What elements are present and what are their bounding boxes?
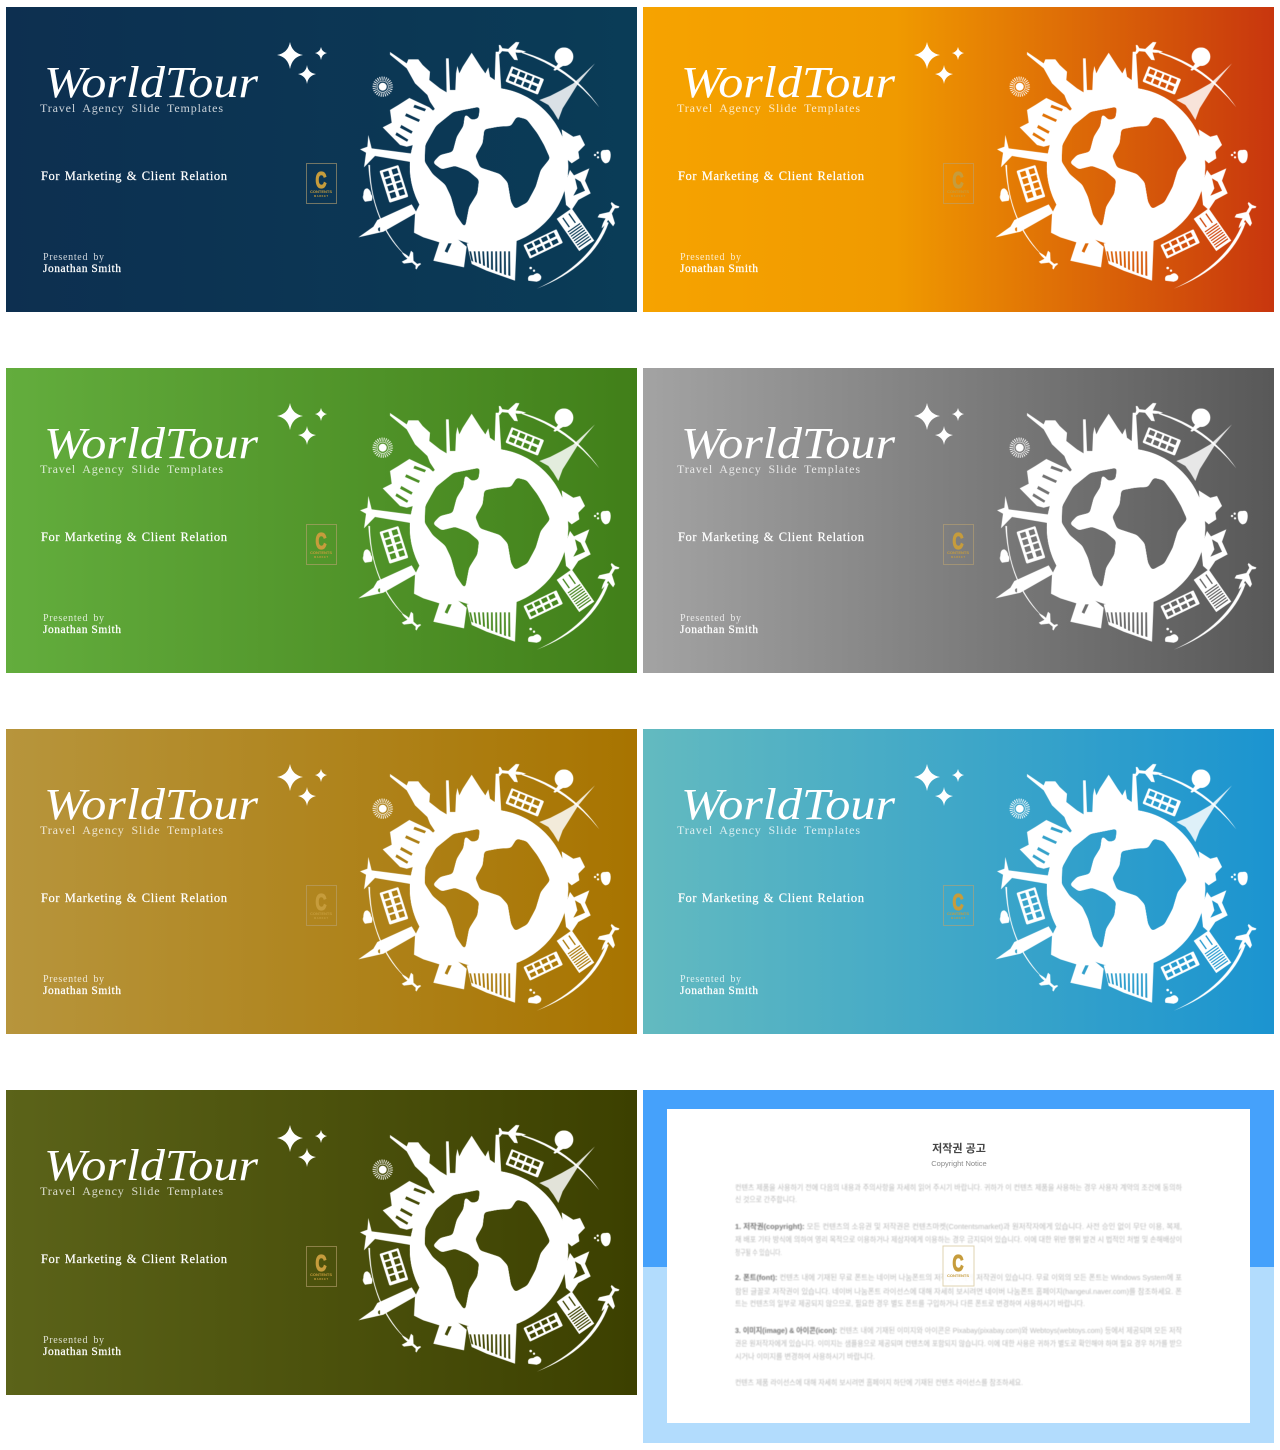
logo: CONTENTS bbox=[310, 911, 332, 916]
logo: MARKET bbox=[951, 556, 965, 559]
copyright body text: 트는 컨텐츠의 일부로 제공되지 않으므로, 필요한 경우 별도 폰트를 구입하거나 다른 폰트로 변경하여 사용하시기 바랍니다. bbox=[735, 1298, 1085, 1308]
subtitle: Travel Agency Slide Templates bbox=[677, 462, 860, 476]
logo: MARKET bbox=[314, 1278, 328, 1281]
logo bbox=[306, 524, 336, 564]
copyright body text: 신 것으로 간주합니다. bbox=[735, 1194, 797, 1204]
presenter name: Jonathan Smith bbox=[43, 985, 121, 997]
illustration: globe with landmarks bbox=[358, 1123, 623, 1372]
logo: CONTENTS bbox=[947, 1273, 969, 1278]
title: WorldTour bbox=[681, 780, 896, 829]
icon: stars bbox=[914, 42, 964, 84]
tagline: For Marketing & Client Relation bbox=[41, 530, 228, 544]
presenter name: Jonathan Smith bbox=[43, 263, 121, 275]
tagline: For Marketing & Client Relation bbox=[41, 1252, 228, 1266]
icon: stars bbox=[277, 403, 327, 445]
icon: stars bbox=[277, 764, 327, 806]
logo: C bbox=[316, 528, 326, 554]
logo: CONTENTS bbox=[310, 189, 332, 194]
logo bbox=[944, 164, 974, 204]
title: WorldTour bbox=[681, 58, 896, 107]
logo bbox=[944, 524, 974, 564]
illustration: globe with landmarks bbox=[358, 762, 623, 1011]
icon: stars bbox=[914, 403, 964, 445]
logo: CONTENTS bbox=[310, 550, 332, 555]
tagline: For Marketing & Client Relation bbox=[41, 169, 228, 183]
logo: MARKET bbox=[951, 195, 965, 198]
icon: stars bbox=[914, 764, 964, 806]
panel: copyright notice bbox=[643, 1090, 1274, 1443]
panel: gray slide bbox=[643, 368, 1274, 673]
tagline: For Marketing & Client Relation bbox=[678, 169, 865, 183]
illustration: globe with landmarks bbox=[995, 40, 1260, 289]
logo bbox=[944, 886, 974, 926]
copyright body text: 권은 원저작자에게 있습니다. 이미지는 샘플용으로 제공되며 컨텐츠에 포함되지 않습니다. 이에 대한 사용은 귀하가 별도로 확인해야 하며 필요 경우 허가를 받으 bbox=[735, 1338, 1182, 1348]
tagline: For Marketing & Client Relation bbox=[41, 891, 228, 905]
panel: teal-blue slide bbox=[643, 729, 1274, 1034]
logo: C bbox=[316, 1250, 326, 1276]
presenter name: Jonathan Smith bbox=[680, 624, 758, 636]
title: WorldTour bbox=[44, 419, 259, 468]
copyright body text: 3. 이미지(image) & 아이콘(icon): 컨텐츠 내에 기재된 이미지와 아이콘은 Pixabay(pixabay.com)와 Webtoys(webtoys.com) 등에서 제공되며 모든 저작 bbox=[735, 1325, 1182, 1335]
copyright body text: 시거나 이미지를 변경하여 사용하시기 바랍니다. bbox=[735, 1351, 875, 1361]
illustration: globe with landmarks bbox=[358, 401, 623, 650]
logo bbox=[306, 1246, 336, 1286]
presenter name: Jonathan Smith bbox=[43, 624, 121, 636]
copyright body text: 1. 저작권(copyright): 모든 컨텐츠의 소유권 및 저작권은 컨텐츠마켓(Contentsmarket)과 원저작자에게 있습니다. 사전 승인 없이 무단 이용, 복제, bbox=[735, 1221, 1182, 1231]
title: WorldTour bbox=[44, 780, 259, 829]
subtitle: Travel Agency Slide Templates bbox=[40, 101, 223, 115]
copyright body text: 2. 폰트(font): 컨텐츠 내에 기재된 무료 폰트는 네이버 나눔폰트의 저작권자에게 저작권이 있습니다. 무료 이외의 모든 폰트는 Windows System에 포 bbox=[735, 1272, 1182, 1282]
logo: C bbox=[952, 889, 964, 915]
logo: CONTENTS bbox=[947, 189, 969, 194]
panel: green slide bbox=[6, 368, 637, 673]
copyright body text bbox=[735, 1182, 1182, 1387]
presenter name: Jonathan Smith bbox=[680, 263, 758, 275]
copyright body text: 컨텐츠 제품을 사용하기 전에 다음의 내용과 주의사항을 자세히 읽어 주시기 바랍니다. 귀하가 이 컨텐츠 제품을 사용하는 경우 사용자 계약의 조건에 동의하 bbox=[735, 1182, 1182, 1192]
copyright body text: 컨텐츠 제품 라이선스에 대해 자세히 보시려면 홈페이지 하단에 기재된 컨텐츠 라이선스를 참조하세요. bbox=[735, 1377, 1023, 1387]
presenter name: Jonathan Smith bbox=[43, 1346, 121, 1358]
logo: MARKET bbox=[314, 917, 328, 920]
logo bbox=[306, 886, 336, 926]
logo bbox=[943, 1246, 974, 1286]
subtitle: Travel Agency Slide Templates bbox=[40, 823, 223, 837]
logo: CONTENTS bbox=[947, 550, 969, 555]
presenter name: Jonathan Smith bbox=[680, 985, 758, 997]
logo: C bbox=[952, 1250, 964, 1276]
subtitle: Travel Agency Slide Templates bbox=[40, 462, 223, 476]
logo: C bbox=[952, 167, 964, 193]
subtitle: Travel Agency Slide Templates bbox=[40, 1184, 223, 1198]
subtitle: Travel Agency Slide Templates bbox=[677, 823, 860, 837]
subtitle: Travel Agency Slide Templates bbox=[677, 101, 860, 115]
logo: MARKET bbox=[314, 195, 328, 198]
presenter label: Presented by bbox=[680, 974, 741, 985]
logo: C bbox=[316, 889, 326, 915]
title: WorldTour bbox=[681, 419, 896, 468]
illustration: globe with landmarks bbox=[995, 401, 1260, 650]
logo: CONTENTS bbox=[947, 911, 969, 916]
logo: C bbox=[316, 167, 326, 193]
illustration: globe with landmarks bbox=[995, 762, 1260, 1011]
icon: stars bbox=[277, 1125, 327, 1167]
panel: ochre slide bbox=[6, 729, 637, 1034]
logo: MARKET bbox=[951, 917, 965, 920]
presenter label: Presented by bbox=[43, 613, 104, 624]
icon: stars bbox=[277, 42, 327, 84]
presenter label: Presented by bbox=[43, 252, 104, 263]
title: WorldTour bbox=[44, 1141, 259, 1190]
panel: orange slide bbox=[643, 7, 1274, 312]
copyright body text: 함된 글꼴로 저작권이 있습니다. 네이버 나눔폰트 라이선스에 대해 자세히 보시려면 네이버 나눔폰트 홈페이지(hangeul.naver.com)를 참조하세요. 폰 bbox=[735, 1286, 1182, 1296]
copyright body text: 재 배포 기타 방식에 의하여 영리 목적으로 이용하거나 제삼자에게 이용하는 경우 금지되어 있습니다. 이에 대한 위반 행위 발견 시 법적인 처벌 및 손해배상이 bbox=[735, 1234, 1182, 1244]
copyright body text: 청구될 수 있습니다. bbox=[735, 1248, 782, 1257]
presenter label: Presented by bbox=[43, 1335, 104, 1346]
panel: olive slide bbox=[6, 1090, 637, 1395]
presenter label: Presented by bbox=[680, 252, 741, 263]
copyright subheading: Copyright Notice bbox=[931, 1159, 987, 1168]
logo bbox=[306, 164, 336, 204]
presenter label: Presented by bbox=[680, 613, 741, 624]
tagline: For Marketing & Client Relation bbox=[678, 530, 865, 544]
copyright heading: 저작권 공고 bbox=[932, 1141, 986, 1155]
tagline: For Marketing & Client Relation bbox=[678, 891, 865, 905]
logo: MARKET bbox=[314, 556, 328, 559]
illustration: globe with landmarks bbox=[358, 40, 623, 289]
panel: navy slide bbox=[6, 7, 637, 312]
title: WorldTour bbox=[44, 58, 259, 107]
presenter label: Presented by bbox=[43, 974, 104, 985]
logo: C bbox=[952, 528, 964, 554]
logo: CONTENTS bbox=[310, 1272, 332, 1277]
